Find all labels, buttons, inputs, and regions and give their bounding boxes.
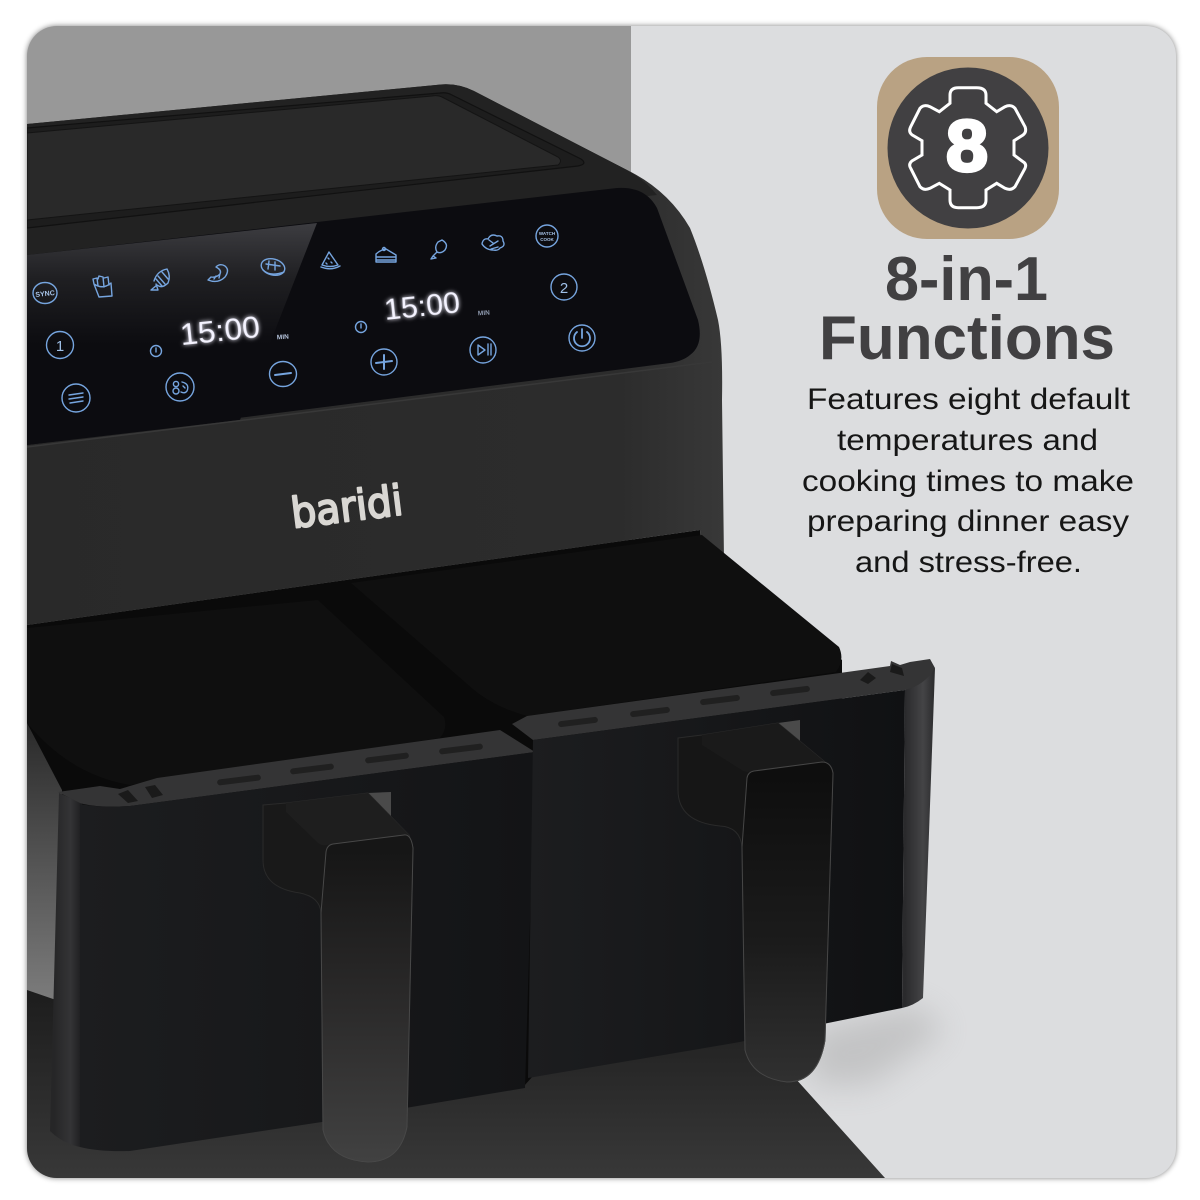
left handle [263, 792, 413, 1162]
description text: cooking times to make [802, 465, 1134, 498]
heading: Functions [819, 304, 1115, 373]
right handle [678, 720, 833, 1082]
left drawer front [80, 752, 535, 1151]
brand logo: baridi [288, 476, 405, 538]
description text: and stress-free. [855, 546, 1082, 579]
gear outline [910, 88, 1026, 208]
icon: steak [260, 258, 286, 276]
display right unit: MIN [478, 310, 490, 317]
icon: clock left [150, 346, 162, 356]
icon: fish [151, 269, 169, 290]
icon: button 1 [46, 332, 74, 358]
right rim slots [558, 686, 810, 727]
description text [802, 383, 1134, 579]
drawer cavity [27, 530, 842, 1086]
air fryer product [27, 84, 935, 1162]
right drawer rim [512, 659, 935, 740]
icon: sync [33, 282, 57, 304]
right rim notch [860, 664, 904, 684]
icon: menu [62, 384, 90, 412]
left rim notch [118, 785, 163, 803]
right drawer front [528, 690, 905, 1078]
display right: 15:00 [382, 286, 462, 327]
icon: button 1: 1 [56, 338, 64, 355]
icon: shrimp [208, 265, 228, 281]
icon: button 2: 2 [560, 280, 568, 297]
lid recess [27, 93, 584, 228]
icon: watch cook [536, 225, 558, 247]
icon: plus [371, 349, 397, 375]
icon: watch cook: COOK [540, 237, 555, 242]
icon: drumstick [431, 240, 446, 259]
description text: preparing dinner easy [807, 505, 1129, 538]
display left: 15:00 [178, 309, 262, 352]
icon: temperature timer [166, 373, 194, 401]
right basket [700, 535, 842, 660]
icon: clock right [356, 322, 366, 332]
display left unit: MIN [277, 334, 289, 341]
icon: vegetables [482, 235, 504, 250]
icon: play pause [470, 337, 496, 363]
heading [819, 245, 1115, 373]
right drawer gloss edge [902, 668, 935, 1008]
right drawer [512, 659, 935, 1082]
left drawer rim [58, 730, 535, 807]
icon: power [569, 325, 595, 351]
icon: watch cook: WATCH [539, 231, 555, 236]
icon: pizza [321, 252, 340, 269]
left basket [27, 600, 445, 785]
left side panel [27, 723, 62, 1000]
left drawer [50, 730, 535, 1162]
main body [27, 84, 724, 625]
heading: 8-in-1 [885, 245, 1048, 314]
top surface [28, 84, 656, 232]
control panel glass [27, 188, 712, 447]
description text: temperatures and [837, 424, 1098, 457]
icon: cake [376, 248, 396, 262]
badge icon: eight functions [877, 57, 1059, 239]
appliance shadow on light panel [810, 1005, 945, 1085]
dark floor [27, 985, 885, 1178]
left drawer gloss edge [50, 793, 82, 1147]
icon: button 2 [551, 274, 577, 300]
icon: fries [93, 276, 112, 297]
badge number: 8 [946, 107, 988, 187]
icon: sync: SYNC [35, 290, 55, 299]
icon: minus [270, 362, 296, 386]
left rim slots [217, 743, 483, 786]
description text: Features eight default [807, 383, 1131, 416]
